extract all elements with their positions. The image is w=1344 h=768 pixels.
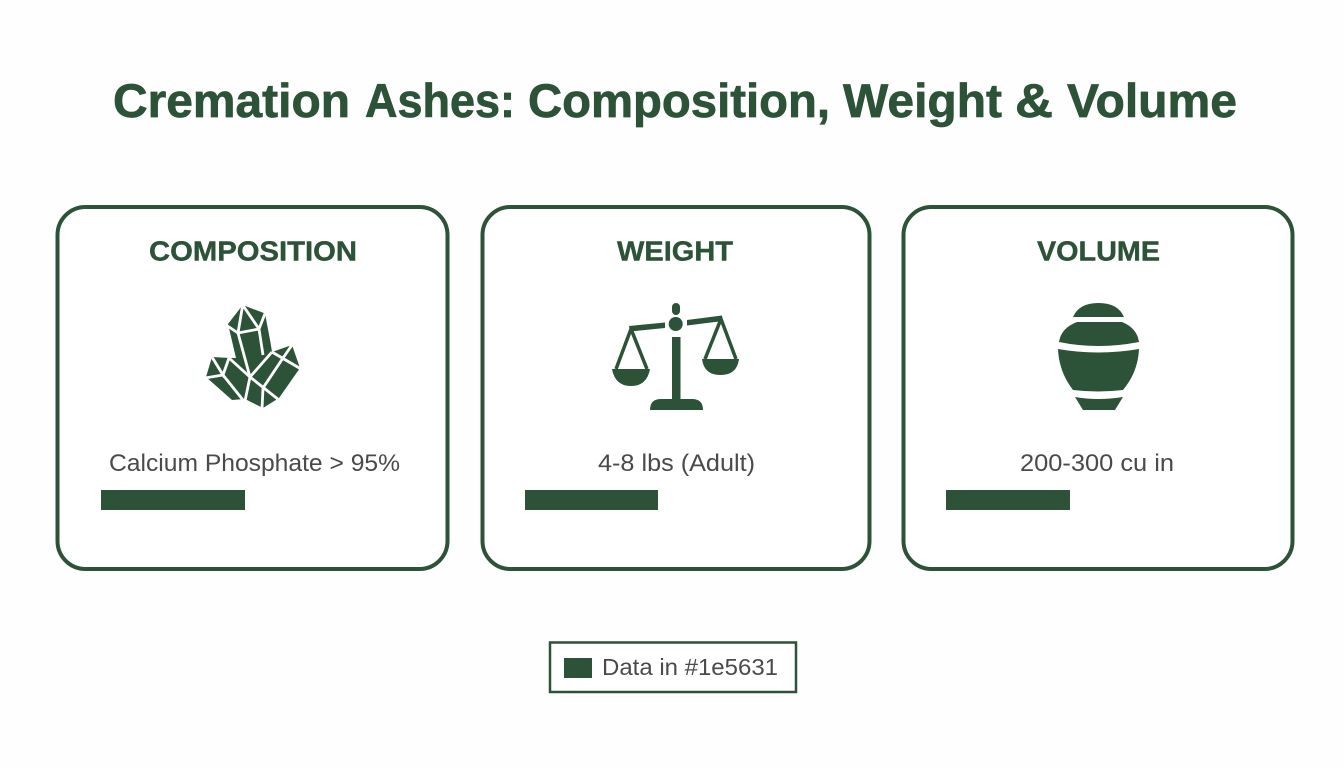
bar: weight [525,490,658,510]
title: Weight [843,74,1002,127]
title: Cremation [113,74,350,127]
heading: composition: COMPOSITION [149,236,357,266]
composition value: Calcium Phosphate > 95% [109,450,400,477]
title: Volume [1067,74,1237,127]
panel: weight [482,207,870,569]
icon: crystals [205,305,301,409]
heading: volume: VOLUME [1037,236,1160,266]
weight value: 4-8 lbs (Adult) [598,450,755,477]
legend [550,642,796,692]
panel: volume [904,207,1292,569]
panel: composition [58,207,448,569]
bar: volume [946,490,1070,510]
bar: composition [101,490,245,510]
icon: urn [1058,303,1139,410]
legend swatch [564,658,592,678]
legend label: Data in #1e5631 [602,654,778,680]
heading: weight: WEIGHT [617,236,733,266]
title: & [1015,74,1053,127]
icon: balance scale [612,303,739,410]
title: Ashes: [365,74,515,127]
title: Composition, [528,74,830,127]
title [113,74,1237,127]
volume value: 200-300 cu in [1020,450,1174,477]
